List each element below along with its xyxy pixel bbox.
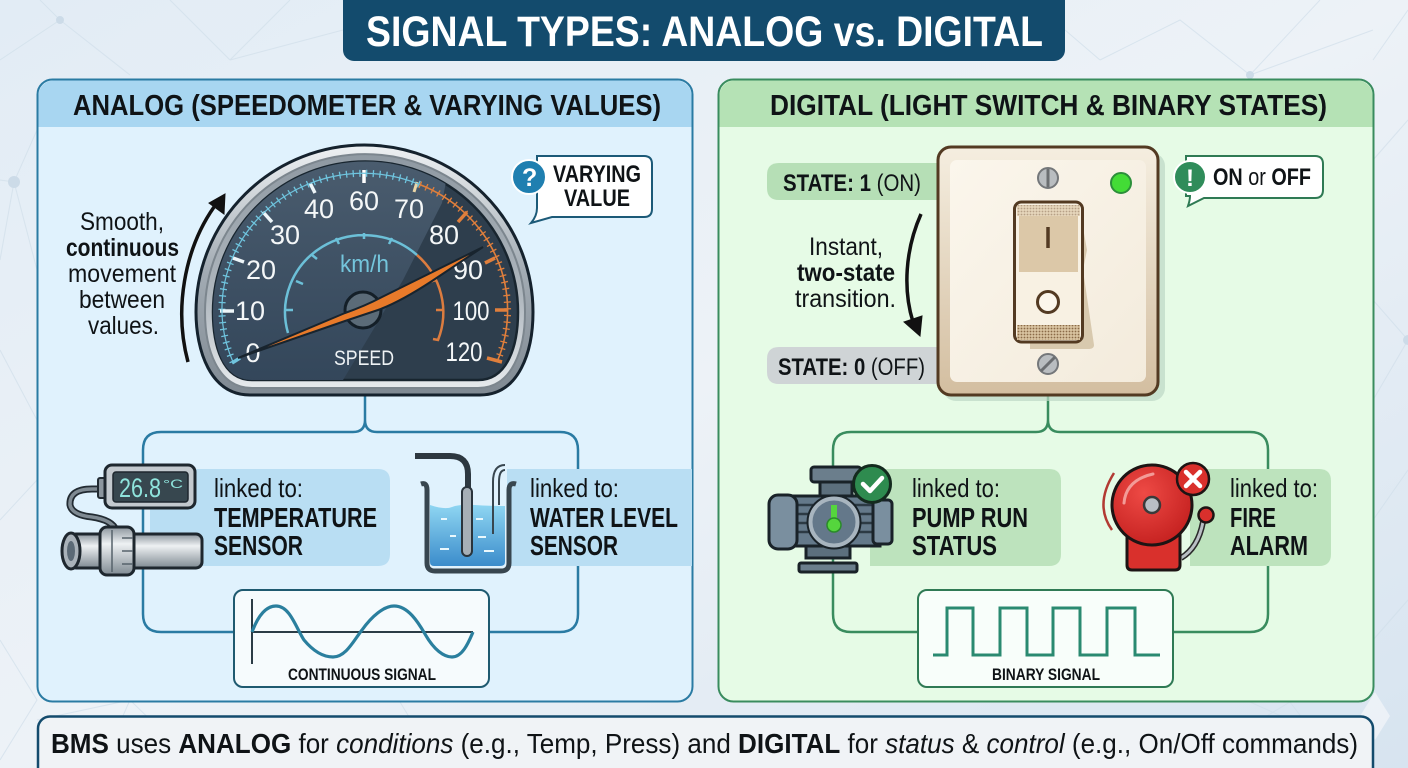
continuous signal box bbox=[234, 590, 489, 687]
analog description text: continuous bbox=[66, 234, 179, 262]
label: fire alarm: FIRE bbox=[1230, 502, 1276, 533]
label: pump run status: linked to: bbox=[912, 473, 1000, 503]
icon: fire alarm bell bbox=[1103, 463, 1214, 570]
analog description text bbox=[66, 208, 179, 340]
digital description text: two-state bbox=[797, 259, 895, 287]
binary signal box bbox=[918, 590, 1173, 687]
callout: on or off: ! bbox=[1186, 165, 1194, 192]
km/h label: km/h bbox=[340, 251, 389, 278]
gauge numbers: 30 bbox=[270, 220, 300, 250]
arrow: state transition bbox=[904, 214, 922, 336]
summary bar: BMS uses ANALOG for conditions (e.g., Temp, Press) and DIGITAL for status & control (e.g., On/Off commands) bbox=[51, 728, 1358, 759]
screws bbox=[1038, 168, 1058, 374]
binary signal box: BINARY SIGNAL bbox=[992, 665, 1100, 684]
callout: varying value bbox=[512, 156, 652, 223]
rocker bbox=[1014, 202, 1094, 349]
label: water level sensor: WATER LEVEL bbox=[530, 502, 678, 533]
panel: analog bbox=[38, 80, 692, 702]
icon: pump bbox=[769, 466, 892, 572]
gauge hub bbox=[345, 292, 381, 328]
callout: varying value: VALUE bbox=[564, 185, 630, 212]
icon: temperature sensor bbox=[62, 465, 202, 575]
label: temperature sensor: TEMPERATURE bbox=[214, 502, 377, 533]
panel: digital bbox=[718, 80, 1374, 702]
state 0 label: STATE: 0 (OFF) bbox=[778, 354, 925, 381]
callout: on or off: ON or OFF bbox=[1213, 164, 1311, 191]
digital header bbox=[720, 80, 1372, 127]
speed label: SPEED bbox=[334, 347, 394, 370]
analog description text: movement bbox=[68, 260, 176, 288]
gauge numbers: 80 bbox=[429, 220, 459, 250]
label: temperature sensor: SENSOR bbox=[214, 530, 303, 561]
gauge numbers bbox=[235, 186, 490, 368]
callout: varying value: VARYING bbox=[553, 161, 641, 188]
digital description text: Instant, bbox=[809, 233, 883, 261]
analog description text: Smooth, bbox=[80, 208, 164, 236]
green indicator light bbox=[1111, 173, 1131, 193]
label: pump run status bbox=[870, 469, 1061, 566]
gauge numbers: 100 bbox=[452, 296, 490, 326]
gauge numbers: 90 bbox=[453, 255, 483, 285]
digital description text bbox=[795, 233, 896, 313]
callout: varying value: ? bbox=[522, 164, 537, 192]
label: water level sensor: SENSOR bbox=[530, 530, 618, 561]
summary bar bbox=[38, 716, 1373, 768]
gauge numbers: 0 bbox=[245, 338, 261, 368]
state 1 label: STATE: 1 (ON) bbox=[783, 170, 921, 197]
label: fire alarm: linked to: bbox=[1230, 473, 1318, 503]
digital header: DIGITAL (LIGHT SWITCH & BINARY STATES) bbox=[770, 90, 1327, 122]
analog connector lines bbox=[143, 395, 578, 632]
analog header bbox=[38, 80, 692, 127]
state 0 label bbox=[767, 347, 940, 384]
icon: water level sensor bbox=[415, 456, 516, 571]
analog description text: between bbox=[79, 286, 165, 314]
state 1 label bbox=[767, 163, 940, 200]
label: water level sensor bbox=[507, 469, 692, 566]
icon: temperature sensor: 26.8 bbox=[119, 473, 161, 503]
arrow: rising motion bbox=[182, 194, 225, 362]
analog header: ANALOG (SPEEDOMETER & VARYING VALUES) bbox=[73, 90, 661, 122]
callout: on or off bbox=[1174, 156, 1323, 206]
label: temperature sensor bbox=[150, 469, 390, 566]
gauge numbers: 70 bbox=[394, 194, 424, 224]
sine wave bbox=[252, 606, 473, 657]
gauge needle bbox=[238, 247, 483, 358]
label: pump run status: STATUS bbox=[912, 530, 997, 561]
label: water level sensor: linked to: bbox=[530, 473, 619, 503]
gauge numbers: 40 bbox=[304, 194, 334, 224]
gauge numbers: 20 bbox=[246, 255, 276, 285]
analog description text: values. bbox=[88, 312, 159, 340]
square wave bbox=[933, 608, 1160, 655]
label: pump run status: PUMP RUN bbox=[912, 502, 1028, 533]
continuous signal box: CONTINUOUS SIGNAL bbox=[288, 665, 436, 684]
inner speed arc bbox=[285, 233, 443, 340]
label: fire alarm bbox=[1190, 469, 1331, 566]
title banner: SIGNAL TYPES: ANALOG vs. DIGITAL bbox=[366, 8, 1043, 56]
gauge ticks bbox=[220, 170, 508, 363]
gauge numbers: 60 bbox=[349, 186, 379, 216]
gauge numbers: 10 bbox=[235, 296, 265, 326]
digital connector lines bbox=[833, 395, 1268, 632]
gauge numbers: 120 bbox=[446, 337, 482, 367]
digital description text: transition. bbox=[795, 285, 896, 313]
icon: temperature sensor: °C bbox=[163, 477, 183, 491]
speedometer gauge bbox=[196, 145, 533, 395]
label: temperature sensor: linked to: bbox=[214, 473, 303, 503]
decorative sparkle bbox=[1360, 692, 1390, 740]
label: fire alarm: ALARM bbox=[1230, 530, 1308, 561]
light switch bbox=[938, 147, 1165, 401]
